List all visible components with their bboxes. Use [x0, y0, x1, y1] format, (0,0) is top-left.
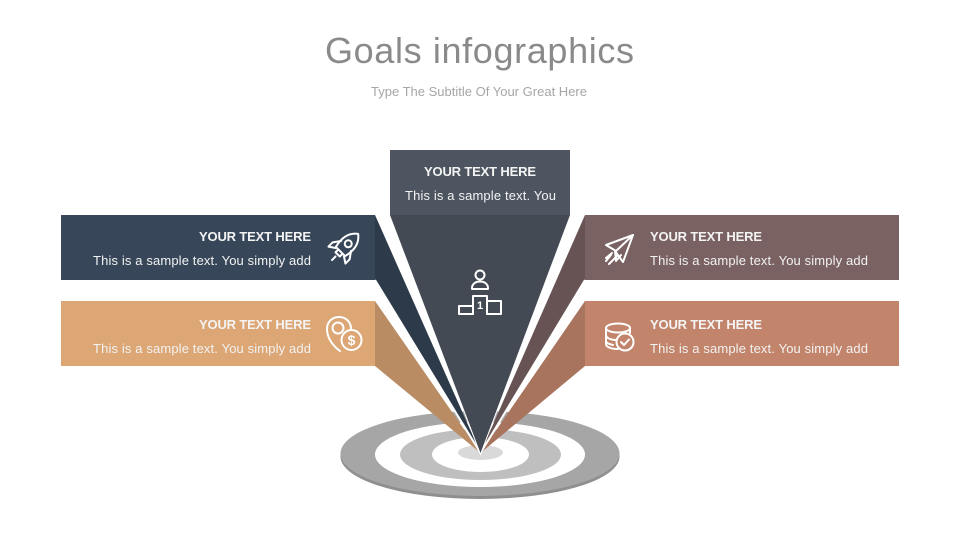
- wedge: [375, 215, 480, 453]
- header band: [390, 150, 570, 215]
- icon: database with check: [606, 324, 634, 350]
- target: [340, 411, 620, 499]
- wedge edge: [480, 280, 585, 453]
- heading: YOUR TEXT HERE: [650, 229, 762, 244]
- body text: This is a sample text. You: [405, 188, 556, 203]
- title: Goals infographics: [325, 30, 634, 71]
- body text: This is a sample text. You simply add: [650, 341, 868, 356]
- icon: rocket: [323, 225, 367, 269]
- heading: YOUR TEXT HERE: [199, 229, 311, 244]
- icon: podium: 1: [477, 300, 483, 312]
- band: [61, 215, 375, 280]
- middle ring: [400, 429, 561, 480]
- wedge edge: [375, 280, 480, 453]
- outer ring: [340, 411, 620, 496]
- panel: right bottom: [480, 301, 899, 453]
- panel: left top: [61, 215, 480, 453]
- icon: location pin with dollar: $: [348, 332, 356, 348]
- heading: YOUR TEXT HERE: [424, 164, 536, 179]
- wedge: [480, 301, 585, 453]
- band: [585, 301, 899, 366]
- band: [585, 215, 899, 280]
- panel: left bottom: [61, 301, 480, 453]
- panel: right top: [480, 215, 899, 453]
- panel: center: [390, 150, 570, 453]
- body text: This is a sample text. You simply add: [93, 253, 311, 268]
- inner white ring: [432, 437, 529, 472]
- heading: YOUR TEXT HERE: [199, 317, 311, 332]
- icon: podium: [459, 270, 501, 314]
- center wedge: [390, 215, 570, 453]
- subtitle: Type The Subtitle Of Your Great Here: [371, 84, 587, 99]
- icon: location pin with dollar: [327, 317, 362, 351]
- heading: YOUR TEXT HERE: [650, 317, 762, 332]
- body text: This is a sample text. You simply add: [650, 253, 868, 268]
- body text: This is a sample text. You simply add: [93, 341, 311, 356]
- wedge: [375, 301, 480, 453]
- center edge: [390, 215, 570, 453]
- bullseye: [458, 445, 503, 460]
- icon: paper plane: [606, 235, 633, 264]
- band: [61, 301, 375, 366]
- white ring: [375, 422, 585, 487]
- target base side: [340, 414, 620, 499]
- wedge: [480, 215, 585, 453]
